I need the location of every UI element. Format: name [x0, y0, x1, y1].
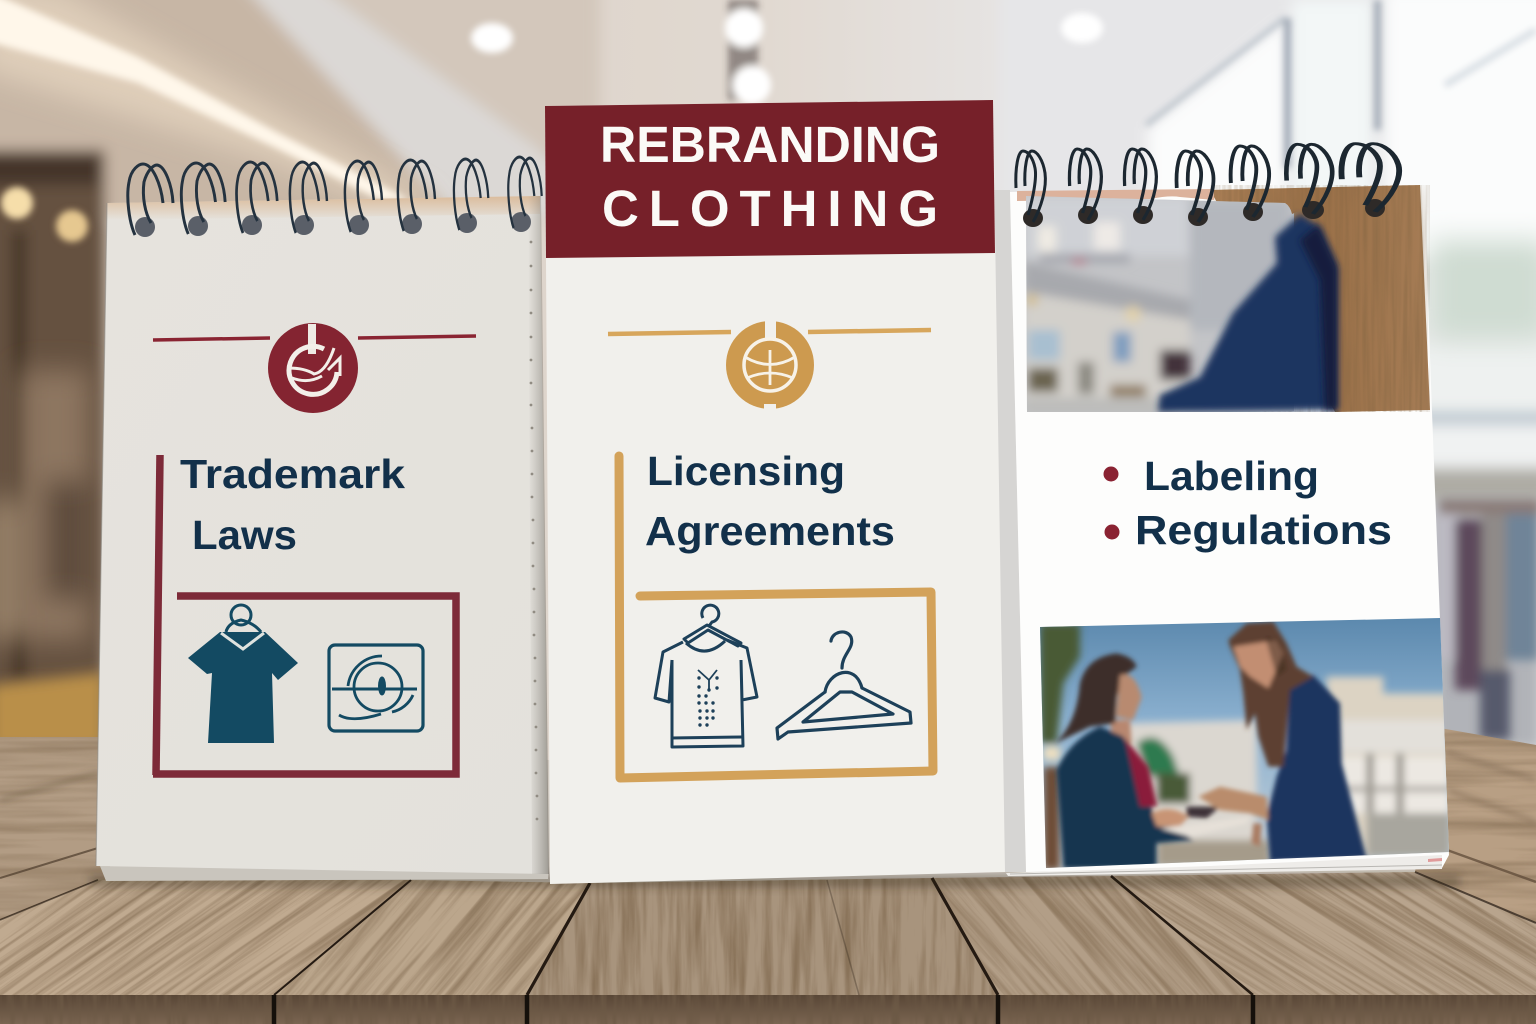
frame: trademark icons	[153, 455, 456, 775]
spiral binding right	[1016, 144, 1399, 227]
notebook: labeling regulations	[992, 144, 1453, 877]
notebook: trademark laws	[96, 157, 549, 881]
heading: licensing agreements: Licensing	[647, 448, 845, 494]
title banner: REBRANDING	[600, 116, 940, 173]
icon: gold emblem with rules	[608, 319, 931, 410]
title banner: CLOTHING	[602, 180, 938, 237]
icon: trademark seal with rules	[153, 323, 476, 413]
photo: store and navy jacket	[1017, 185, 1431, 420]
icon: coat hanger	[777, 632, 911, 739]
bottom page stack	[1006, 855, 1442, 876]
far planks left	[0, 737, 110, 930]
heading: labeling regulations	[1104, 453, 1392, 553]
heading: licensing agreements	[645, 448, 895, 554]
plank tops	[0, 870, 1536, 1000]
spiral binding left	[128, 157, 542, 237]
wooden table	[0, 725, 1536, 1024]
heading: labeling regulations: Regulations	[1135, 507, 1392, 553]
blurred store background	[0, 0, 1536, 760]
far planks right	[1415, 725, 1536, 925]
notebook: licensing agreements	[545, 100, 1005, 884]
plank cracks	[0, 872, 1536, 995]
title banner	[545, 100, 995, 258]
frame: licensing icons	[619, 456, 933, 778]
perforation dots	[530, 241, 538, 820]
heading: labeling regulations: Labeling	[1144, 453, 1319, 499]
icon: registered mark box	[329, 645, 423, 731]
heading: trademark laws: Trademark	[180, 451, 405, 497]
photo: two businesswomen	[1037, 617, 1453, 877]
heading: licensing agreements: Agreements	[645, 508, 895, 554]
heading: trademark laws	[180, 451, 405, 558]
table front edge	[0, 995, 1536, 1024]
heading: trademark laws: Laws	[192, 512, 297, 558]
icon: teal t-shirt on hanger	[188, 605, 298, 743]
icon: outline t-shirt on hanger	[655, 605, 757, 747]
